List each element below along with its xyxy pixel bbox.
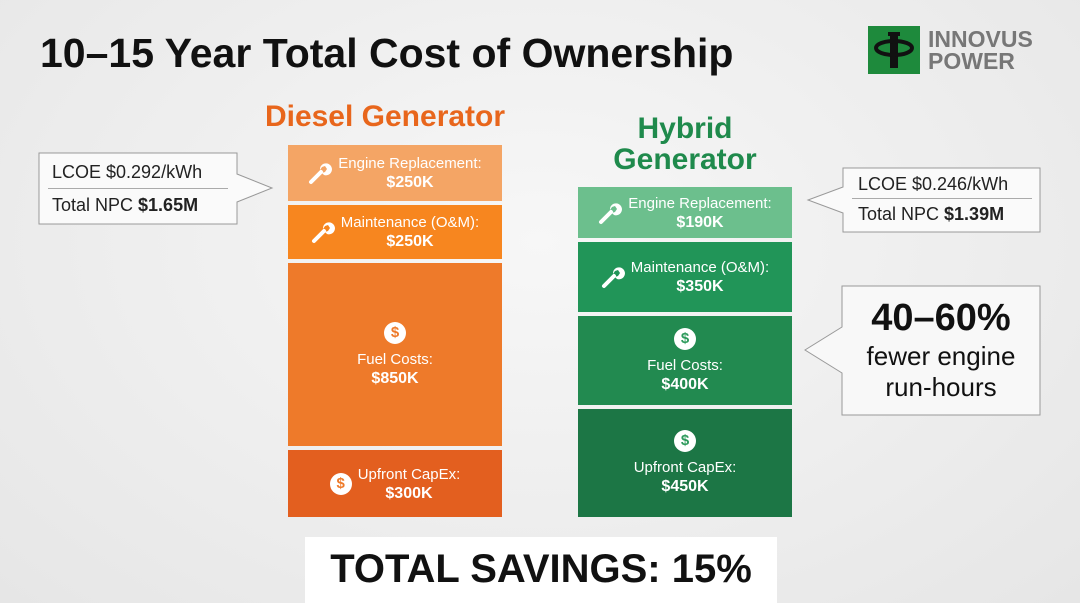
heading: diesel: Diesel Generator	[265, 100, 505, 133]
segment: engine replacement: Engine Replacement:	[628, 194, 772, 212]
segment: capex: $	[337, 474, 345, 492]
callout: diesel LCOE: Total NPC $1.65M	[52, 195, 198, 215]
logo	[868, 26, 1033, 74]
segment: capex: $450K	[661, 478, 709, 495]
segment: fuel	[578, 316, 792, 405]
callout: hybrid LCOE	[806, 168, 1040, 232]
diesel column	[288, 145, 502, 517]
segment: capex: Upfront CapEx:	[358, 466, 460, 482]
callout: diesel LCOE	[38, 152, 274, 224]
segment: engine replacement	[578, 187, 792, 238]
segment: capex: $	[681, 432, 689, 449]
segment: capex: $300K	[385, 484, 433, 502]
title: 10–15 Year Total Cost of Ownership	[40, 30, 733, 76]
segment: maintenance: Maintenance (O&M):	[631, 259, 769, 276]
segment: capex	[288, 450, 502, 517]
segment: fuel	[288, 263, 502, 446]
segment: maintenance	[578, 242, 792, 312]
logo: POWER	[928, 48, 1015, 74]
heading: hybrid: Generator	[613, 143, 757, 176]
heading: hybrid	[613, 112, 757, 176]
segment: engine replacement: $250K	[386, 174, 434, 191]
segment: fuel: Fuel Costs:	[647, 356, 723, 374]
callout: run-hours	[804, 286, 1040, 416]
segment: maintenance: $250K	[386, 233, 434, 250]
segment: fuel: $850K	[371, 370, 419, 386]
segment: maintenance	[288, 205, 502, 259]
segment: capex	[578, 409, 792, 517]
total savings banner	[305, 537, 777, 603]
hybrid column	[578, 187, 792, 517]
segment: maintenance: Maintenance (O&M):	[341, 214, 479, 231]
segment: engine replacement: Engine Replacement:	[338, 155, 482, 172]
total savings banner: TOTAL SAVINGS: 15%	[330, 547, 752, 591]
segment: capex: Upfront CapEx:	[634, 459, 736, 476]
segment: engine replacement: $190K	[676, 214, 724, 230]
callout: run-hours: fewer engine	[867, 341, 1015, 371]
heading: hybrid: Hybrid	[637, 112, 732, 145]
logo: INNOVUS	[928, 26, 1033, 52]
segment: maintenance: $350K	[676, 278, 724, 295]
segment: fuel: $	[681, 330, 689, 346]
callout: run-hours: run-hours	[885, 372, 997, 402]
callout: diesel LCOE: LCOE $0.292/kWh	[52, 162, 202, 182]
segment: fuel: Fuel Costs:	[357, 350, 433, 368]
segment: fuel: $400K	[661, 376, 709, 392]
segment: fuel: $	[391, 324, 399, 340]
callout: hybrid LCOE: Total NPC $1.39M	[858, 204, 1004, 224]
callout: hybrid LCOE: LCOE $0.246/kWh	[858, 174, 1008, 194]
callout: run-hours: 40–60%	[871, 297, 1011, 339]
segment: engine replacement	[288, 145, 502, 201]
